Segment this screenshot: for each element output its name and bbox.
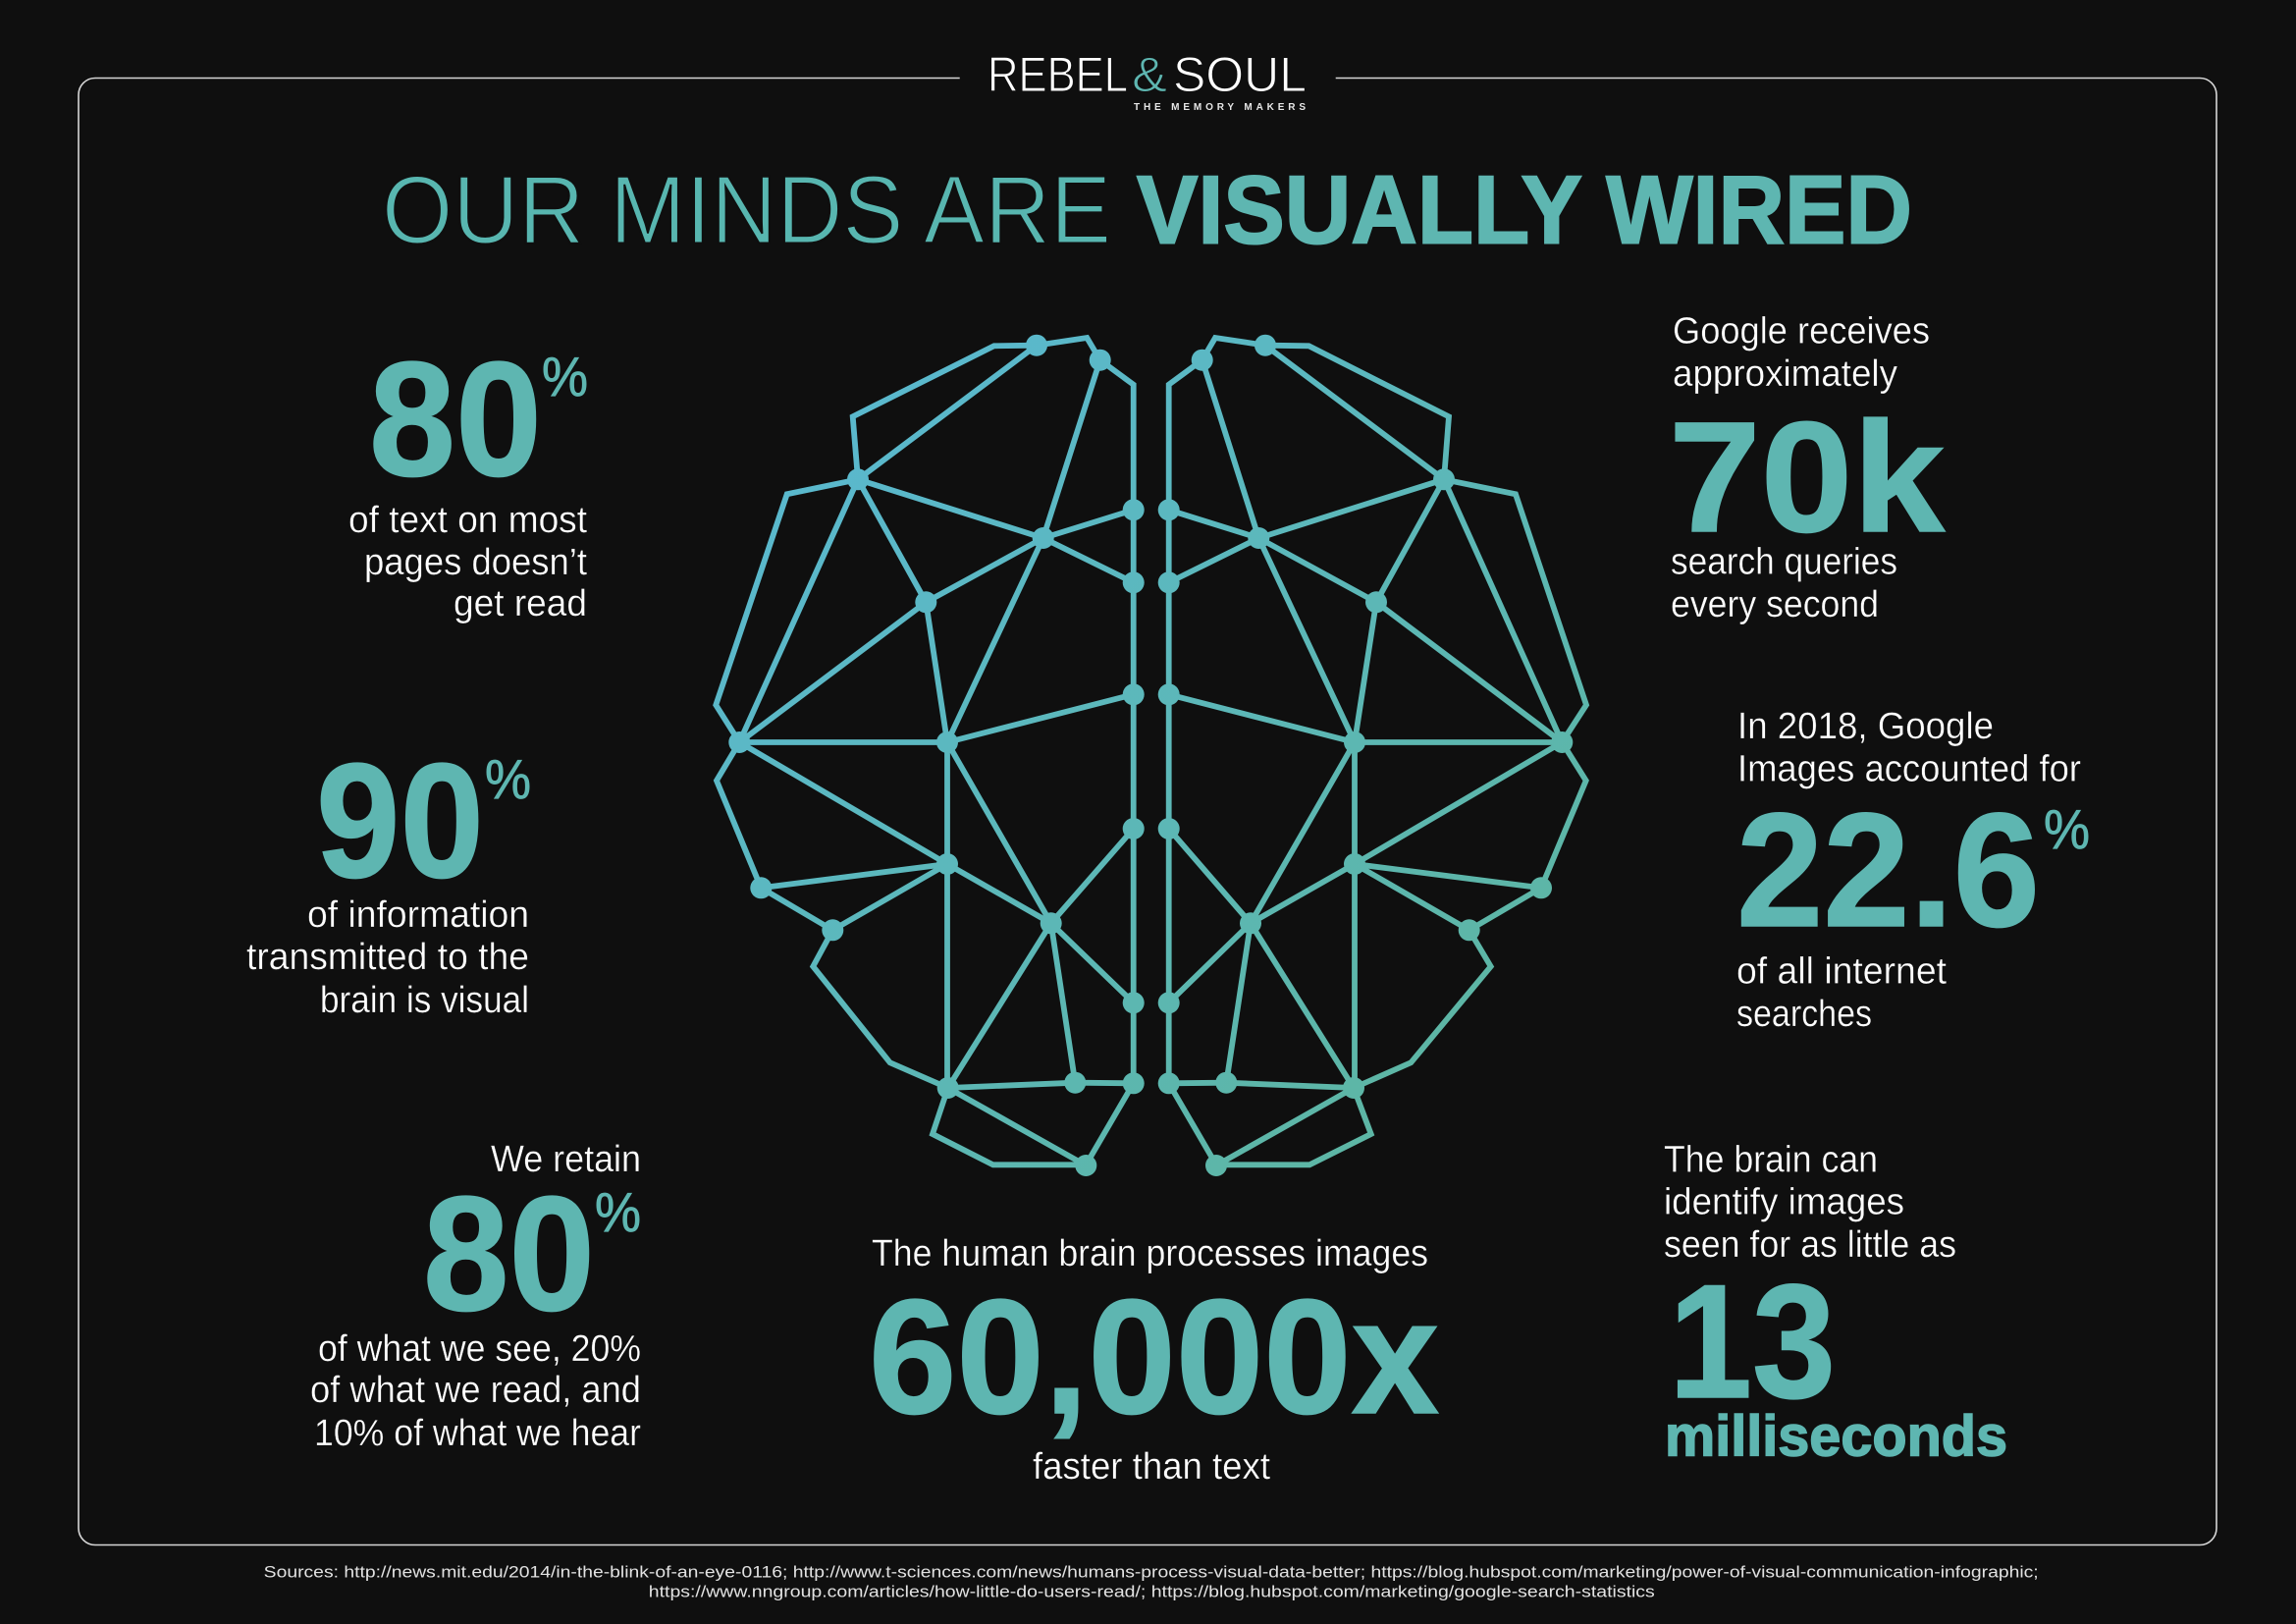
lead-in text: approximately — [1673, 353, 1897, 395]
caption: every second — [1671, 584, 1879, 625]
lead-in text: Google receives — [1673, 310, 1930, 352]
left internal connections — [739, 346, 1134, 1165]
left hemisphere — [716, 335, 1145, 1176]
lead-in text: Images accounted for — [1737, 748, 2081, 789]
sources footnote: Sources: http://news.mit.edu/2014/in-the-blink-of-an-eye-0116; http://www.t-sciences.com/news/humans-process-visual-data-better; https://blog.hubspot.com/marketing/power-of-visual-communication-infographic; — [264, 1563, 2039, 1582]
caption: transmitted to the — [246, 937, 529, 978]
number 90: 90 — [316, 731, 484, 912]
brain network diagram — [716, 335, 1586, 1176]
number 60,000x: 60,000x — [869, 1267, 1439, 1448]
number 80: 80 — [423, 1164, 595, 1345]
caption — [348, 500, 587, 624]
caption: of all internet — [1736, 950, 1947, 992]
caption: of what we read, and — [310, 1370, 641, 1411]
title: VISUALLY WIRED — [1137, 156, 1912, 264]
caption: pages doesn’t — [364, 542, 587, 583]
left outline — [716, 338, 1134, 1164]
title: OUR MINDS ARE — [382, 156, 1111, 264]
caption — [1736, 950, 1947, 1035]
number 70k: 70k — [1669, 389, 1946, 565]
stat: we retain 80% — [310, 1139, 641, 1454]
number 80: 80 — [369, 329, 542, 511]
right internal connections — [1169, 346, 1562, 1165]
unit: milliseconds: milliseconds — [1665, 1405, 2007, 1469]
stat: 70k queries — [1669, 310, 1946, 625]
lead-in text — [1737, 706, 2081, 789]
logo: Rebel & Soul — [988, 47, 1307, 113]
sources footnote: https://www.nngroup.com/articles/how-little-do-users-read/; https://blog.hubspot.com/marketing/google-search-statistics — [649, 1583, 1655, 1601]
lead-in text: The brain can — [1664, 1139, 1878, 1180]
right outline — [1169, 338, 1586, 1164]
title — [382, 156, 1912, 264]
caption: 10% of what we hear — [314, 1413, 641, 1454]
number 13: 13 — [1669, 1251, 1836, 1432]
caption: of information — [307, 894, 529, 936]
stat: 13 milliseconds — [1664, 1139, 2007, 1469]
lead-in text — [1664, 1139, 1956, 1266]
percent sign: % — [485, 748, 531, 811]
stat: 60,000x faster — [869, 1233, 1439, 1488]
caption: searches — [1736, 994, 1872, 1035]
caption — [1671, 542, 1897, 625]
lead-in text: seen for as little as — [1664, 1224, 1956, 1266]
stat: 80% of text — [348, 329, 588, 624]
percent sign: % — [542, 346, 588, 408]
lead-in text: The human brain processes images — [872, 1233, 1428, 1274]
logo: Rebel & Soul: THE MEMORY MAKERS — [1134, 102, 1306, 113]
caption: brain is visual — [320, 980, 529, 1021]
caption: get read — [454, 583, 587, 624]
right hemisphere — [1158, 335, 1586, 1176]
caption: faster than text — [1033, 1446, 1270, 1488]
lead-in text: identify images — [1664, 1182, 1904, 1223]
caption: of text on most — [348, 500, 587, 541]
lead-in text: We retain — [491, 1139, 641, 1180]
lead-in text: In 2018, Google — [1737, 706, 1994, 747]
caption — [246, 894, 529, 1021]
logo: Rebel & Soul: SOUL — [1173, 47, 1307, 102]
number 22.6: 22.6 — [1736, 780, 2040, 960]
caption — [310, 1328, 641, 1454]
caption: of what we see, 20% — [318, 1328, 641, 1370]
sources footnote — [264, 1563, 2039, 1601]
caption: search queries — [1671, 542, 1897, 583]
logo: Rebel & Soul: & — [1132, 47, 1167, 102]
stat: 90% visual — [246, 731, 531, 1021]
stat: 22.6% image searches — [1736, 706, 2090, 1035]
percent sign: % — [595, 1181, 641, 1244]
right nodes — [1158, 335, 1573, 1176]
lead-in text — [1673, 310, 1930, 395]
left nodes — [728, 335, 1145, 1176]
logo: Rebel & Soul: REBEL — [988, 47, 1128, 102]
percent sign: % — [2044, 798, 2090, 861]
